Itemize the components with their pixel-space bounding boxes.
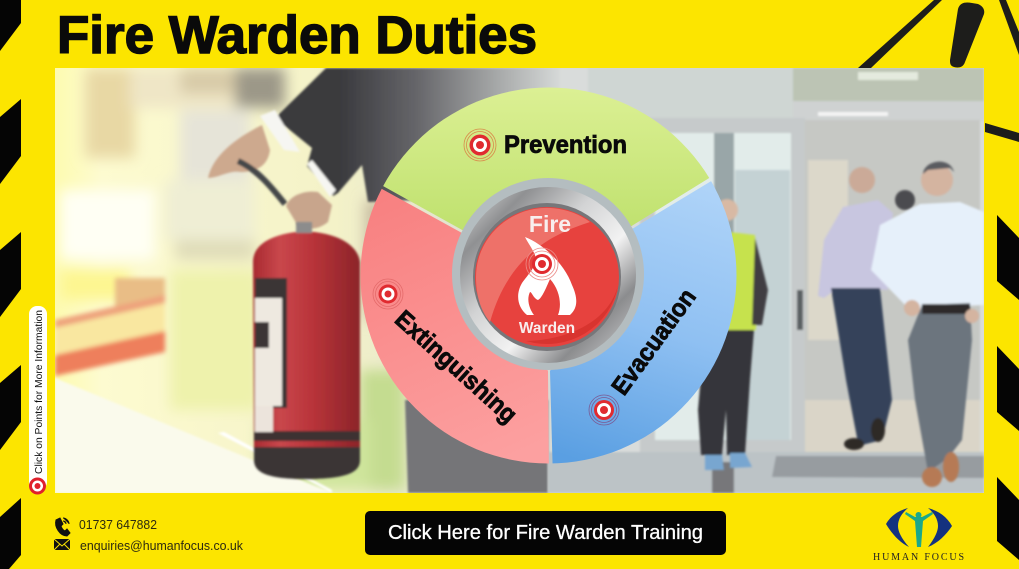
man in white shirt [871, 162, 984, 487]
building exterior and doors [548, 68, 984, 493]
text: Fire: Fire [529, 211, 571, 237]
text: Warden: Warden [519, 320, 575, 337]
segment: evacuation [550, 181, 736, 464]
icon: envelope [54, 539, 70, 550]
floor [55, 378, 332, 493]
hint pill: click on points [29, 306, 47, 494]
button: fire warden training: Click Here for Fire Warden Training [388, 522, 703, 544]
warning triangle fragment, top right [858, 0, 1019, 142]
label: extinguishing: Extinguishing [389, 305, 523, 429]
fire extinguisher [253, 222, 360, 479]
button: fire warden training [365, 511, 726, 555]
crate on the floor [55, 278, 165, 376]
contact: email: enquiries@humanfocus.co.uk [80, 539, 244, 553]
blurred venue background [60, 68, 405, 490]
icon: flame [518, 237, 576, 315]
label: evacuation: Evacuation [606, 284, 702, 400]
logo: human focus: HUMAN FOCUS [873, 552, 964, 563]
wheel diagram [360, 88, 736, 464]
icon: phone [56, 518, 70, 536]
man in lilac shirt [818, 167, 915, 450]
contact: phone: 01737 647882 [79, 518, 157, 532]
centre metal ring [452, 178, 644, 370]
hands and hose [208, 125, 332, 229]
woman in hi-vis vest [698, 199, 768, 470]
photo background [55, 68, 984, 493]
hint pill: click on points: Click on Points for More Information [33, 310, 45, 474]
target: extinguishing [373, 279, 403, 309]
target: prevention [464, 129, 496, 161]
contact: phone [56, 518, 157, 536]
label: prevention: Prevention [504, 131, 627, 159]
left hazard stripes [0, 0, 21, 569]
segment: prevention [383, 88, 710, 230]
right hazard stripes [997, 215, 1019, 560]
target: evacuation [589, 395, 619, 425]
logo: human focus [873, 508, 964, 563]
title: Fire Warden Duties [57, 6, 537, 65]
target: fire warden [526, 248, 558, 280]
suit jacket [260, 68, 560, 493]
segment: extinguishing [360, 188, 549, 464]
centre red button [475, 207, 619, 347]
